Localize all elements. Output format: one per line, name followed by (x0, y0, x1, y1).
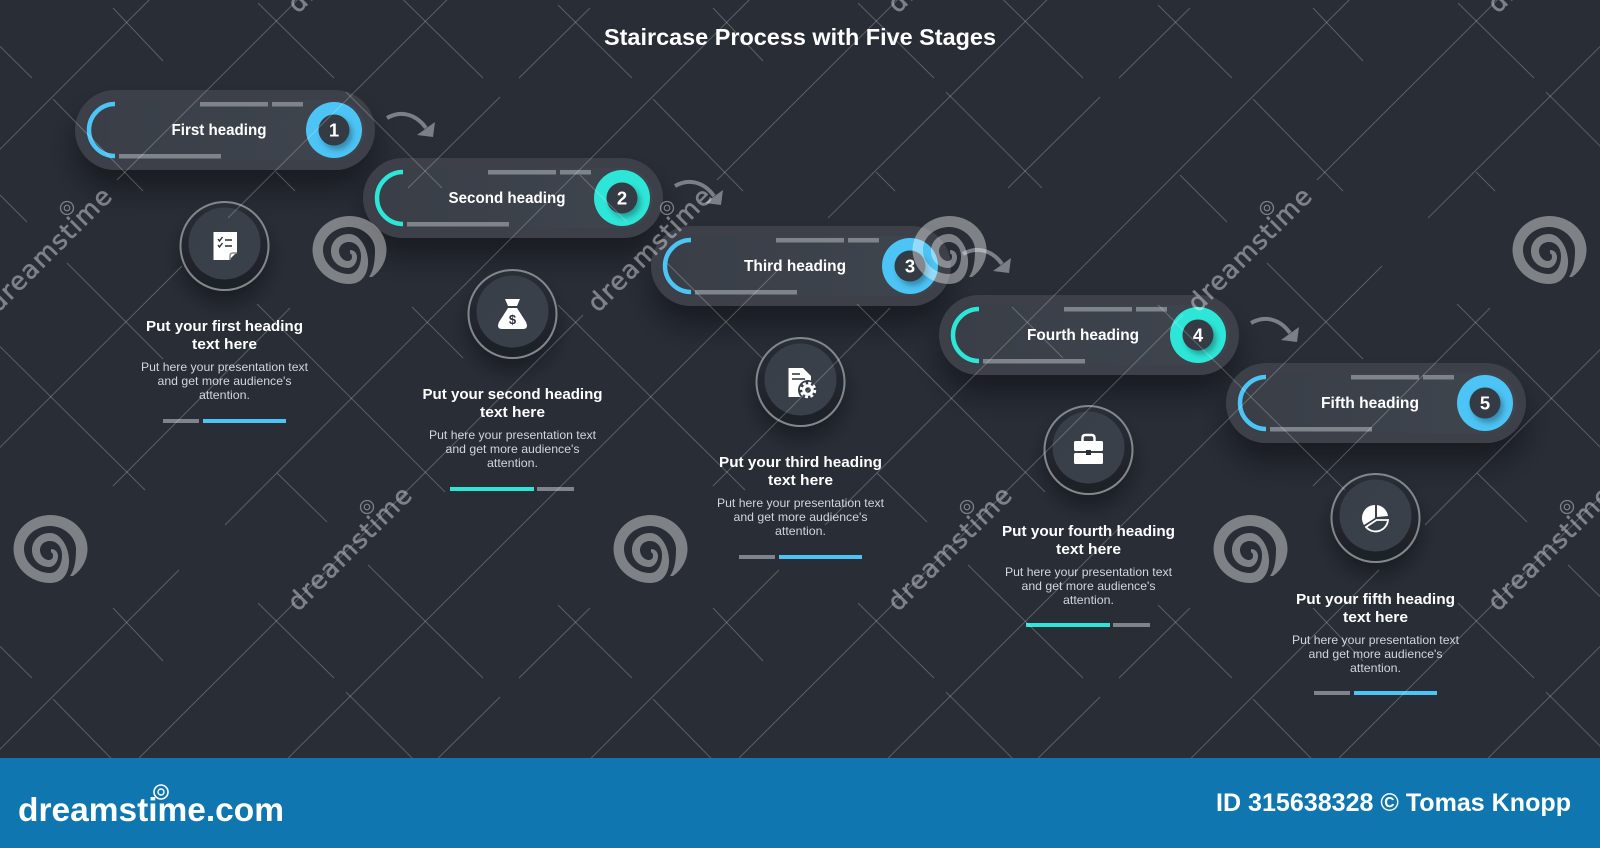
pill: third heading (651, 226, 951, 306)
watermark spirals (14, 216, 1587, 583)
arrow 2 to 3 (675, 182, 723, 205)
arrow 4 to 5 (1251, 319, 1299, 342)
text block 3 (717, 454, 885, 559)
pill: fifth heading: 5 (1480, 392, 1490, 414)
pill: third heading: Third heading (744, 258, 846, 275)
pill: fourth heading: Fourth heading (1027, 327, 1139, 344)
text block 4: attention. (1063, 593, 1114, 607)
text block 2 (422, 386, 602, 491)
text block 2: text here (480, 404, 545, 421)
watermark text (0, 0, 1600, 617)
pill: second heading (363, 158, 663, 238)
panel: step 5 (1226, 363, 1526, 695)
text block 2: Put your second heading (422, 386, 602, 403)
arrow 3 to 4 (963, 250, 1011, 273)
text block 2: attention. (487, 456, 538, 470)
text block 5 (1292, 591, 1460, 695)
pill: second heading: Second heading (448, 190, 566, 207)
panel: step 2 (363, 158, 723, 491)
footer credit: ID 315638328 © Tomas Knopp (1216, 789, 1571, 817)
panel: step 3 (651, 226, 1011, 559)
icon: document with gear (756, 338, 844, 426)
pill: first heading: First heading (172, 122, 266, 139)
icon: money bag (468, 270, 556, 358)
pill: first heading (75, 90, 375, 170)
panel: step 4 (939, 295, 1299, 627)
text block 1: text here (192, 336, 257, 353)
footer logo: dreamstime.com (18, 791, 284, 828)
text block 5: Put your fifth heading (1296, 591, 1455, 608)
text block 5: text here (1343, 609, 1408, 626)
text block 2: and get more audience's (446, 442, 580, 456)
pill: second heading: 2 (617, 188, 627, 208)
text block 4: Put here your presentation text (1005, 565, 1173, 579)
text block 2: Put here your presentation text (429, 428, 597, 442)
footer band (0, 758, 1600, 848)
pill: fourth heading (939, 295, 1239, 375)
text block 3: attention. (775, 524, 826, 538)
icon: checklist (180, 202, 268, 290)
pill: fourth heading: 4 (1193, 324, 1204, 346)
icon: briefcase (1044, 406, 1132, 494)
text block 1 (141, 318, 309, 423)
text block 1: attention. (199, 388, 250, 402)
text block 5: and get more audience's (1308, 647, 1442, 661)
icon: pie chart (1332, 474, 1420, 562)
text block 1: Put here your presentation text (141, 360, 309, 374)
text block 3: text here (768, 472, 833, 489)
icon: money bag: $ (509, 312, 517, 327)
text block 4: Put your fourth heading (1002, 523, 1175, 540)
text block 4: text here (1056, 541, 1121, 558)
pill: third heading: 3 (905, 256, 915, 276)
text block 3: Put here your presentation text (717, 496, 885, 510)
text block 5: attention. (1350, 661, 1401, 675)
text block 3: Put your third heading (719, 454, 882, 471)
panel: step 1 (75, 90, 435, 423)
text block 1: Put your first heading (146, 318, 303, 335)
pill: first heading: 1 (329, 120, 339, 140)
text block 4 (1002, 523, 1175, 627)
text block 4: and get more audience's (1022, 579, 1156, 593)
text block 3: and get more audience's (734, 510, 868, 524)
arrow 1 to 2 (387, 114, 435, 137)
title: Staircase Process with Five Stages (604, 24, 996, 50)
pill: fifth heading (1226, 363, 1526, 443)
pill: fifth heading: Fifth heading (1321, 395, 1419, 412)
text block 5: Put here your presentation text (1292, 633, 1460, 647)
text block 1: and get more audience's (158, 374, 292, 388)
